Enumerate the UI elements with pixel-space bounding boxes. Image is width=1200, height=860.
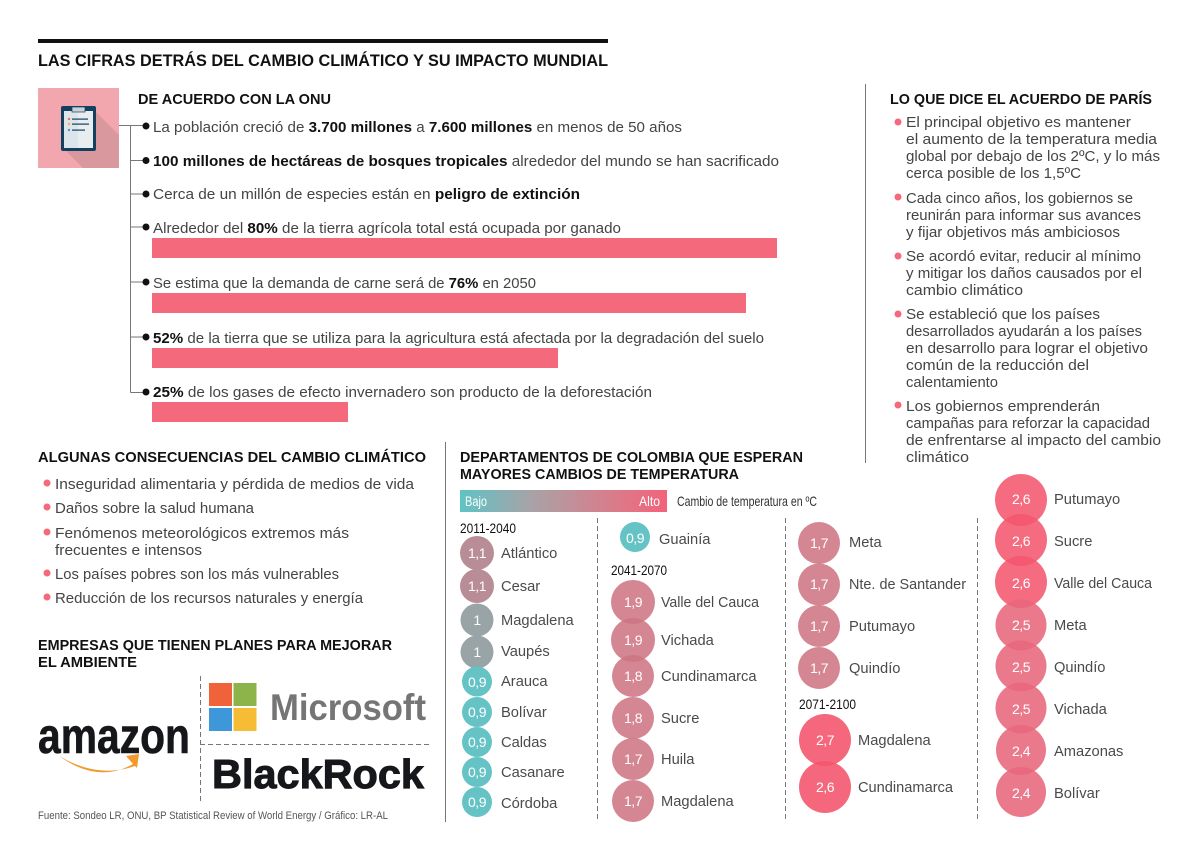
heading: departamentos — [460, 449, 803, 483]
bar: 80% — [152, 238, 777, 258]
column: 2041-2070: 1,8 — [624, 710, 643, 726]
column: 2071-2100 continued: 2,6 — [1012, 533, 1031, 549]
panel: departamentos — [460, 449, 1153, 822]
column: 2071-2100: 2071-2100 — [799, 696, 856, 712]
bar: 52% — [152, 348, 558, 368]
list: París text: cambio climático — [906, 282, 1023, 299]
column: 2041-2070: 2041-2070 — [611, 562, 667, 578]
legend: gradient — [460, 490, 817, 512]
list: París text: climático — [906, 449, 969, 466]
panel: empresas — [38, 637, 432, 822]
column: 2011-2040: Caldas — [501, 735, 547, 751]
column: 2041-2070 — [611, 522, 760, 822]
column: 2071-2100: Cundinamarca — [858, 780, 954, 796]
list: París text: campañas para reforzar la capacidad — [906, 415, 1150, 432]
source: Fuente: Sondeo LR, ONU, BP Statistical Review of World Energy / Gráfico: LR-AL — [38, 810, 388, 822]
list: París text: Cada cinco años, los gobiernos se — [906, 190, 1133, 207]
column: 2011-2040: Cesar — [501, 579, 540, 595]
column: 2041-2070 continued — [798, 522, 966, 689]
column: 2041-2070 continued: 1,7 — [810, 576, 829, 592]
column: 2071-2100 continued: 2,4 — [1012, 743, 1031, 759]
connector tree — [119, 122, 150, 396]
text: población: La población creció de 3.700 millones a 7.600 millones en menos de 50 años — [153, 119, 682, 136]
column: 2011-2040: Atlántico — [501, 546, 557, 562]
list: París text: en desarrollo para lograr el objetivo — [906, 340, 1148, 357]
column: 2041-2070 continued: 1,7 — [810, 660, 829, 676]
column: 2071-2100 continued: 2,5 — [1012, 659, 1031, 675]
list: París text: de enfrentarse al impacto del cambio — [906, 432, 1161, 449]
column: 2071-2100: 2,7 — [816, 732, 835, 748]
list: París text: el aumento de la temperatura media — [906, 131, 1158, 148]
column: 2011-2040: Vaupés — [501, 644, 550, 660]
column: 2011-2040: 0,9 — [468, 794, 487, 810]
list: consecuencias text: Fenómenos meteorológicos extremos más — [55, 525, 349, 542]
logo: Microsoft: Microsoft — [270, 687, 426, 728]
title — [38, 39, 608, 70]
text: bosques: 100 millones de hectáreas de bosques tropicales alrededor del mundo se han sacrificado — [153, 153, 779, 170]
icon: clipboard — [38, 88, 119, 168]
list: París text: Se acordó evitar, reducir al mínimo — [906, 248, 1141, 265]
column: 2011-2040 — [460, 520, 575, 817]
column: 2011-2040: 0,9 — [468, 764, 487, 780]
column: 2041-2070: Huila — [661, 752, 695, 768]
column: 2071-2100 continued: 2,6 — [1012, 575, 1031, 591]
heading: departamentos: MAYORES CAMBIOS DE TEMPERATURA — [460, 466, 739, 483]
list: París text: Los gobiernos emprenderán — [906, 398, 1100, 415]
heading: París: LO QUE DICE EL ACUERDO DE PARÍS — [890, 91, 1152, 108]
list: París text: global por debajo de los 2ºC, y lo más — [906, 148, 1160, 165]
column: 2071-2100 continued: Quindío — [1054, 660, 1105, 676]
list: consecuencias text: Daños sobre la salud humana — [55, 500, 255, 517]
column: 2041-2070: Valle del Cauca — [661, 595, 760, 611]
panel: acuerdo de París — [890, 91, 1161, 466]
list: París text: desarrollados ayudarán a los países — [906, 323, 1142, 340]
column: 2041-2070 continued: 1,7 — [810, 535, 829, 551]
heading: departamentos: DEPARTAMENTOS DE COLOMBIA QUE ESPERAN — [460, 449, 803, 466]
column: 2011-2040: 0,9 — [468, 734, 487, 750]
column: 2041-2070 continued: 1,7 — [810, 618, 829, 634]
list: París text — [906, 114, 1161, 466]
column: 2011-2040: Casanare — [501, 765, 565, 781]
column: 2011-2040: 0,9 — [468, 674, 487, 690]
logo: BlackRock: BlackRock — [212, 751, 424, 797]
heading: ONU: DE ACUERDO CON LA ONU — [138, 91, 331, 108]
column: 2041-2070: Magdalena — [661, 794, 735, 810]
column: 2041-2070 continued: Meta — [849, 535, 882, 551]
list: París text: calentamiento — [906, 374, 998, 391]
column: 2011-2040: 1,1 — [468, 545, 487, 561]
column: 2041-2070: 0,9 — [626, 530, 645, 546]
heading: empresas: EL AMBIENTE — [38, 654, 137, 671]
column: 2041-2070: 1,7 — [624, 793, 643, 809]
title: LAS CIFRAS DETRÁS DEL CAMBIO CLIMÁTICO Y SU IMPACTO MUNDIAL — [38, 51, 608, 70]
column: 2011-2040: Magdalena — [501, 613, 575, 629]
column: 2011-2040: 0,9 — [468, 704, 487, 720]
list: consecuencias text: frecuentes e intensos — [55, 542, 202, 559]
logo: Microsoft — [209, 683, 426, 731]
column: 2071-2100 continued: 2,5 — [1012, 617, 1031, 633]
legend: gradient: Bajo — [465, 493, 487, 509]
column: 2011-2040: Bolívar — [501, 705, 547, 721]
list: París text: cerca posible de los 1,5ºC — [906, 165, 1081, 182]
list: consecuencias bullets — [44, 480, 50, 600]
column: 2011-2040: 1 — [473, 644, 481, 660]
column: 2071-2100: Magdalena — [858, 733, 932, 749]
text: demanda de carne: Se estima que la demanda de carne será de 76% en 2050 — [153, 275, 536, 292]
list: París text: y mitigar los daños causados por el — [906, 265, 1142, 282]
column: 2041-2070: 1,8 — [624, 668, 643, 684]
text: deforestación: 25% de los gases de efecto invernadero son producto de la deforestación — [153, 384, 652, 401]
column: 2041-2070: 1,9 — [624, 594, 643, 610]
column: 2011-2040: Córdoba — [501, 796, 558, 812]
column: 2071-2100 continued — [995, 474, 1153, 817]
text: especies: Cerca de un millón de especies están en peligro de extinción — [153, 186, 580, 203]
text: degradación: 52% de la tierra que se utiliza para la agricultura está afectada por la degradación del suelo — [153, 330, 764, 347]
bar: 25% — [152, 402, 348, 422]
list: París bullets — [894, 118, 902, 408]
column: 2071-2100 continued: Sucre — [1054, 534, 1092, 550]
panel: consecuencias — [38, 449, 426, 607]
column: 2041-2070: Guainía — [659, 532, 711, 548]
column: 2071-2100 continued: 2,4 — [1012, 785, 1031, 801]
column: 2071-2100 continued: Meta — [1054, 618, 1087, 634]
column: 2041-2070: Sucre — [661, 711, 699, 727]
column: 2011-2040: 1,1 — [468, 578, 487, 594]
list: París text: y fijar objetivos más ambiciosos — [906, 224, 1120, 241]
logo: amazon: amazon — [38, 708, 190, 764]
legend: gradient: Cambio de temperatura en ºC — [677, 493, 817, 509]
column: 2041-2070: 1,7 — [624, 751, 643, 767]
legend: gradient: Alto — [639, 493, 660, 509]
column: 2011-2040: 2011-2040 — [460, 520, 516, 536]
text: tierra agrícola: Alrededor del 80% de la tierra agrícola total está ocupada por ganado — [153, 220, 621, 237]
column: 2071-2100 continued: 2,6 — [1012, 491, 1031, 507]
list: París text: Se estableció que los países — [906, 306, 1100, 323]
column: 2071-2100 — [799, 696, 954, 813]
column: 2071-2100: 2,6 — [816, 779, 835, 795]
column: 2071-2100 continued: Vichada — [1054, 702, 1108, 718]
column: 2071-2100 continued: Amazonas — [1054, 744, 1123, 760]
list: consecuencias text: Reducción de los recursos naturales y energía — [55, 590, 364, 607]
list: consecuencias text: Los países pobres son los más vulnerables — [55, 566, 339, 583]
column: 2041-2070: 1,9 — [624, 632, 643, 648]
heading: empresas — [38, 637, 392, 671]
column: 2041-2070 continued: Putumayo — [849, 619, 915, 635]
list: París text: común de la reducción del — [906, 357, 1089, 374]
column: 2041-2070: Cundinamarca — [661, 669, 757, 685]
column: 2071-2100 continued: 2,5 — [1012, 701, 1031, 717]
bar: 76% — [152, 293, 746, 313]
heading: empresas: EMPRESAS QUE TIENEN PLANES PARA MEJORAR — [38, 637, 392, 654]
list: consecuencias text: Inseguridad alimentaria y pérdida de medios de vida — [55, 476, 415, 493]
column: 2011-2040: 1 — [473, 612, 481, 628]
list: consecuencias text — [55, 476, 415, 607]
column: 2041-2070 continued: Nte. de Santander — [849, 577, 966, 593]
column: 2011-2040: Arauca — [501, 674, 548, 690]
column: 2041-2070 continued: Quindío — [849, 661, 900, 677]
list: París text: reunirán para informar sus avances — [906, 207, 1141, 224]
column: 2071-2100 continued: Bolívar — [1054, 786, 1100, 802]
column: 2041-2070: Vichada — [661, 633, 715, 649]
heading: consecuencias: ALGUNAS CONSECUENCIAS DEL CAMBIO CLIMÁTICO — [38, 449, 426, 466]
column: 2071-2100 continued: Putumayo — [1054, 492, 1120, 508]
column: 2071-2100 continued: Valle del Cauca — [1054, 576, 1153, 592]
list: París text: El principal objetivo es mantener — [906, 114, 1131, 131]
